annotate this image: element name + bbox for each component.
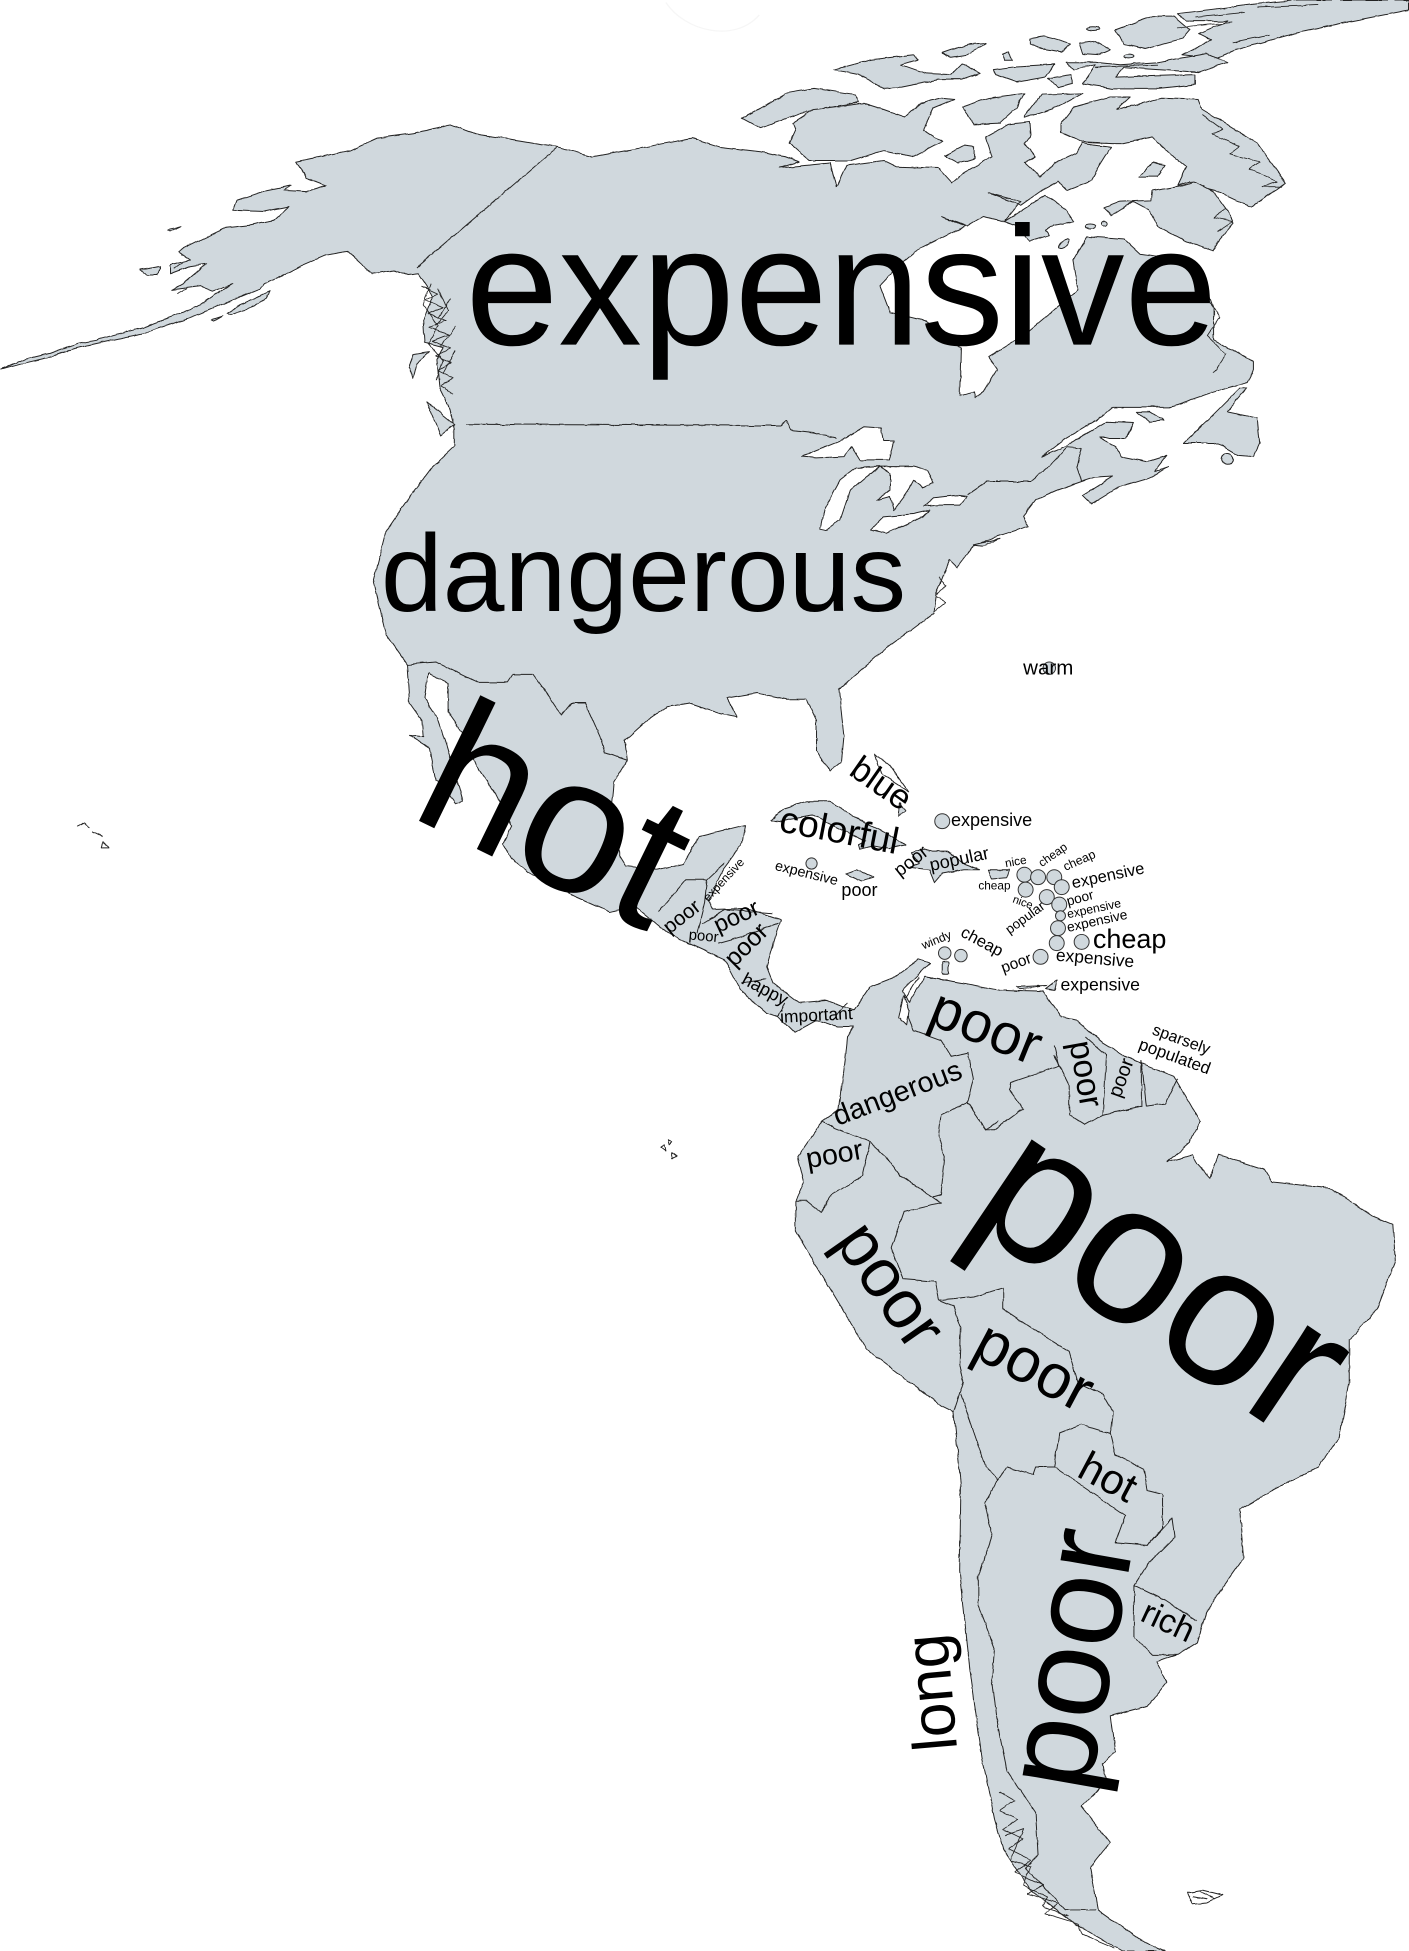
land: Atlantic Canada islands — [973, 388, 1260, 546]
lakes: Great Lakes — [802, 427, 967, 1025]
word: colorful (Cuba): colorful — [776, 798, 903, 862]
word: warm (Bermuda): warm — [1022, 656, 1073, 679]
word: dangerous (Colombia): dangerous — [829, 1054, 966, 1133]
word: cheap (Curacao): cheap — [958, 922, 1007, 960]
word: nice: nice — [1004, 853, 1028, 870]
word: poor (Venezuela): poor — [921, 976, 1051, 1078]
land: Canadian Arctic islands — [742, 0, 1409, 251]
word: cheap: cheap — [1036, 840, 1070, 870]
word: happy (Costa Rica): happy — [739, 969, 792, 1010]
word: cheap: cheap — [1061, 847, 1098, 874]
word: dangerous (United States): dangerous — [381, 513, 906, 635]
word: expensive (Cayman Islands): expensive — [773, 858, 840, 889]
word: windy (Aruba): windy — [919, 928, 953, 953]
word: poor (Nicaragua): poor — [719, 917, 774, 972]
word: cheap (Puerto Rico): cheap — [978, 879, 1011, 893]
word: expensive (Turks and Caicos): expensive — [951, 810, 1032, 830]
word: rich (Uruguay): rich — [1136, 1594, 1200, 1650]
word: hot (Mexico): hot — [389, 658, 725, 969]
word: poor (Honduras): poor — [710, 895, 764, 939]
word: poor (Bolivia): poor — [963, 1306, 1105, 1426]
land: Caribbean islands — [770, 754, 1057, 990]
land: Alaska and Pacific coast islands — [139, 226, 454, 435]
word: sparsely populated (French Guiana): populated — [1136, 1035, 1213, 1078]
word: expensive: expensive — [1070, 859, 1146, 892]
land: small Pacific and South Atlantic islands — [77, 822, 1222, 1904]
word: important (Panama): important — [780, 1003, 853, 1027]
word: poor (Ecuador): poor — [803, 1134, 866, 1175]
word: poor (Haiti): poor — [889, 841, 932, 880]
word: nice: nice — [1011, 894, 1034, 912]
word: poor (Jamaica): poor — [841, 880, 878, 900]
word: expensive (Barbados): expensive — [1055, 945, 1135, 971]
word: expensive (Trinidad): expensive — [1060, 974, 1140, 994]
word: expensive: expensive — [1065, 907, 1129, 935]
word: hot (Paraguay): hot — [1071, 1442, 1145, 1511]
word: poor (Argentina): poor — [973, 1517, 1162, 1800]
word: popular: popular — [1002, 898, 1048, 937]
word: poor (Guatemala): poor — [659, 895, 705, 938]
word: poor (Peru): poor — [820, 1206, 962, 1363]
word: blue (Bahamas): blue — [843, 749, 919, 818]
word: expensive (Canada): expensive — [466, 192, 1217, 381]
word: poor (Suriname): poor — [1104, 1055, 1139, 1100]
word: popular (Dominican Republic): popular — [928, 843, 991, 875]
word: poor (El Salvador): poor — [688, 926, 719, 946]
word: long (Chile): long — [892, 1631, 971, 1754]
word: expensive (Belize): expensive — [700, 855, 747, 904]
word: poor (Brazil): poor — [938, 1071, 1393, 1478]
word: poor: poor — [1065, 887, 1096, 909]
country borders — [407, 147, 1197, 1910]
word: sparsely populated (French Guiana): sparsely — [1150, 1021, 1214, 1059]
word: poor (Grenada): poor — [999, 950, 1034, 977]
word: poor (Guyana): poor — [1061, 1038, 1109, 1110]
word: expensive: expensive — [1066, 896, 1122, 921]
small island dots with word labels — [806, 662, 1089, 964]
word: cheap: cheap — [1093, 924, 1166, 954]
